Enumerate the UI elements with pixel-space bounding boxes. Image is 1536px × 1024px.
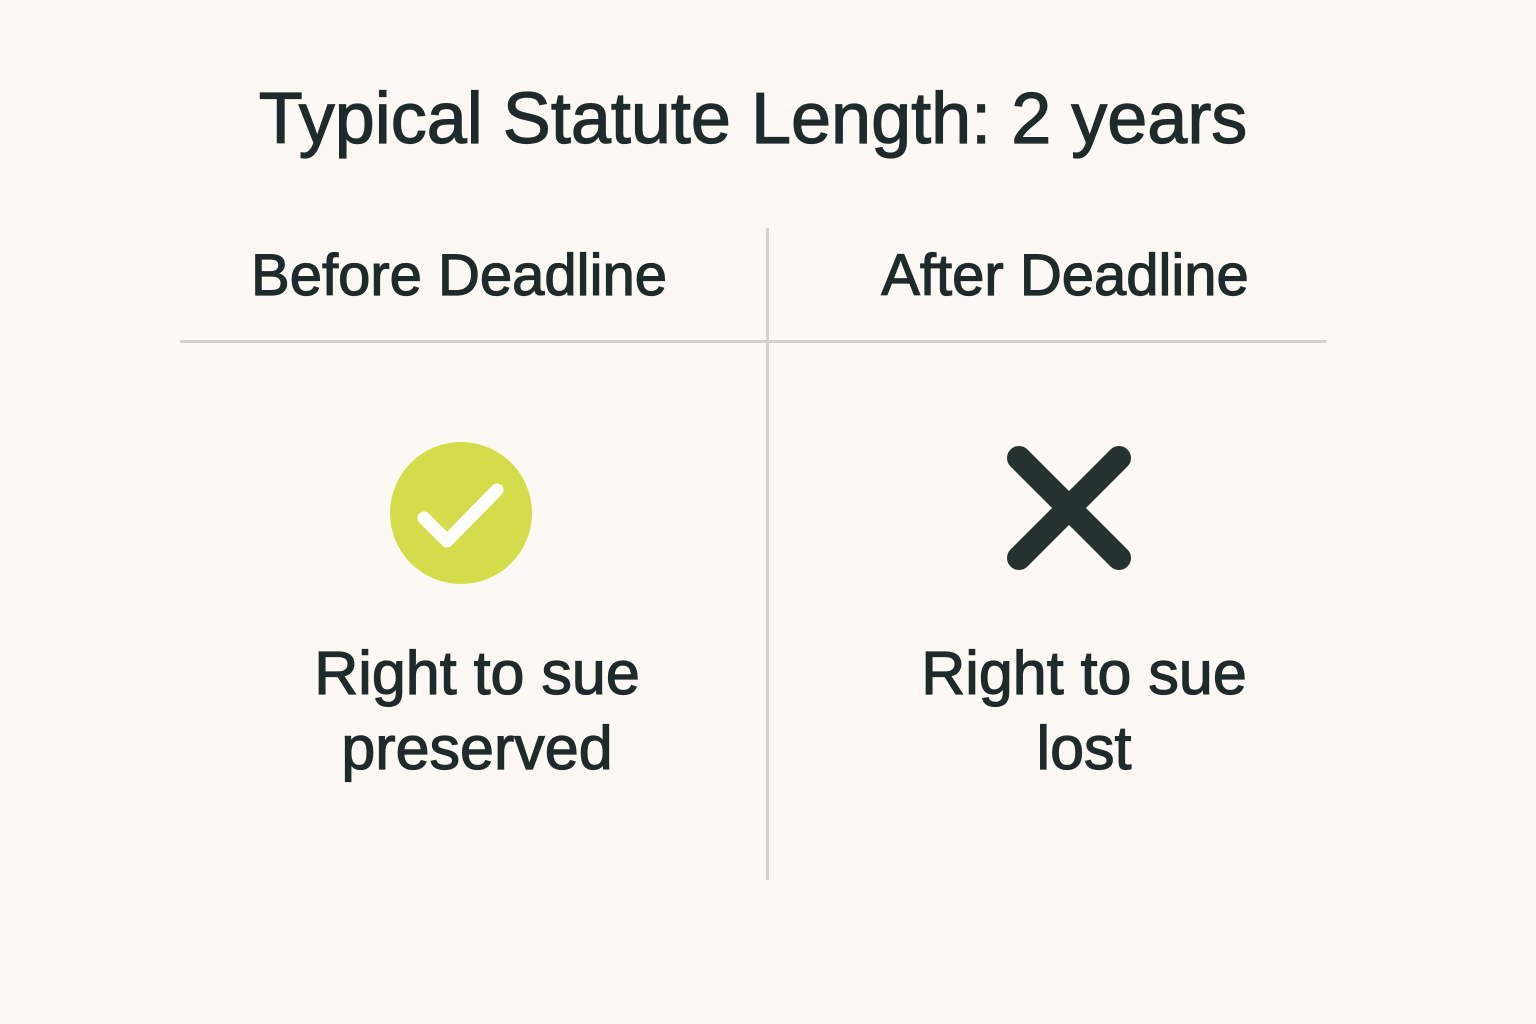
text: right preserved xyxy=(314,639,640,782)
text: right lost xyxy=(921,639,1247,782)
divider vertical xyxy=(766,228,769,880)
text: right preserved: preserved xyxy=(341,714,613,782)
text: right lost: lost xyxy=(1037,714,1131,782)
text: right preserved: Right to sue xyxy=(314,639,640,707)
text: right lost: Right to sue xyxy=(921,639,1247,707)
title: Typical Statute Length: 2 years xyxy=(259,79,1247,159)
heading: after deadline: After Deadline xyxy=(881,243,1249,308)
divider horizontal xyxy=(180,340,1326,343)
icon: cross xyxy=(1007,446,1131,570)
icon: check circle xyxy=(390,442,532,584)
heading: before deadline: Before Deadline xyxy=(251,243,667,308)
